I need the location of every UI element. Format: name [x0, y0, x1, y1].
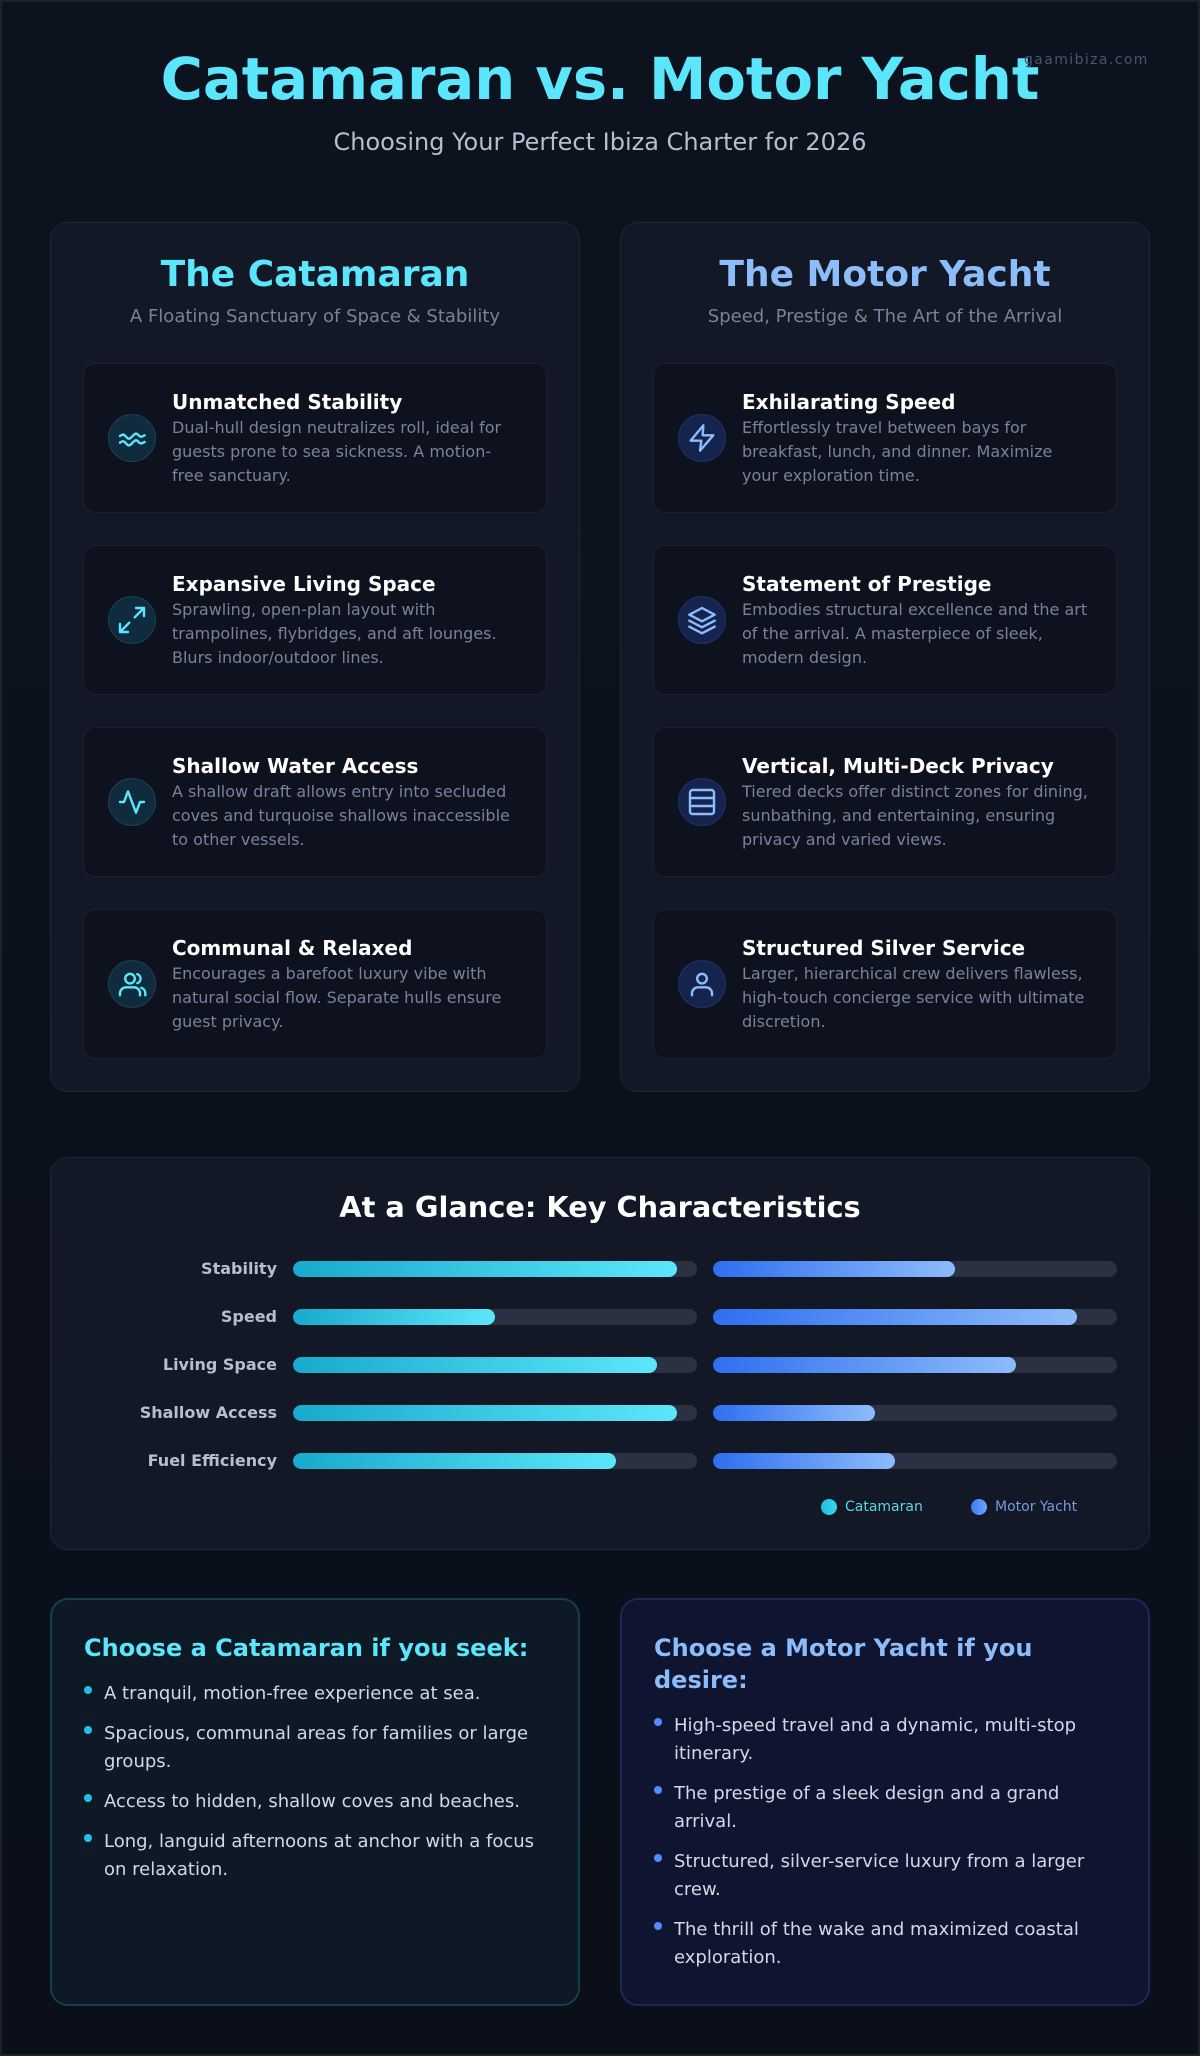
feature: privacy: sunbathing, and entertaining, ensuring — [742, 806, 1055, 825]
bullet list: A tranquil, motion-free experience at sea. — [104, 1683, 480, 1704]
feature: shallow water — [83, 727, 547, 877]
feature: speed: your exploration time. — [742, 466, 920, 485]
heading: Choose a Motor Yacht if you — [654, 1634, 1032, 1662]
panel: motor yacht — [620, 222, 1150, 1092]
feature: communal: Encourages a barefoot luxury vibe with — [172, 964, 487, 983]
feature: speed — [653, 363, 1117, 513]
feature: stability: free sanctuary. — [172, 466, 291, 485]
icon: layers — [678, 596, 726, 644]
bullet dot — [84, 1794, 92, 1802]
feature: living space — [83, 545, 547, 695]
feature: privacy: Vertical, Multi-Deck Privacy — [742, 754, 1054, 778]
feature: service: Larger, hierarchical crew delivers flawless, — [742, 964, 1083, 983]
chart heading: At a Glance: Key Characteristics — [339, 1190, 861, 1224]
feature: living space: Blurs indoor/outdoor lines. — [172, 648, 384, 667]
bars: shallow access: Shallow Access — [140, 1403, 277, 1422]
feature: stability — [83, 363, 547, 513]
icon: activity — [108, 778, 156, 826]
legend: motor yacht: Motor Yacht — [995, 1499, 1077, 1515]
feature: privacy — [653, 727, 1117, 877]
feature: prestige — [653, 545, 1117, 695]
feature: prestige: of the arrival. A masterpiece of sleek, — [742, 624, 1043, 643]
feature: stability: Unmatched Stability — [172, 390, 402, 414]
subtitle: Choosing Your Perfect Ibiza Charter for 2026 — [334, 128, 866, 156]
feature: living space: trampolines, flybridges, and aft lounges. — [172, 624, 497, 643]
bullet list: Access to hidden, shallow coves and beaches. — [104, 1791, 520, 1812]
feature: service: discretion. — [742, 1012, 826, 1031]
feature: stability: Dual-hull design neutralizes roll, ideal for — [172, 418, 501, 437]
bullet dot — [84, 1726, 92, 1734]
feature: living space: Sprawling, open-plan layout with — [172, 600, 435, 619]
bullet list: itinerary. — [674, 1743, 753, 1764]
bullet dot — [654, 1786, 662, 1794]
icon: expand arrows — [108, 596, 156, 644]
panel: choose catamaran — [50, 1598, 580, 2006]
panel: choose motor yacht — [620, 1598, 1150, 2006]
feature: communal: guest privacy. — [172, 1012, 283, 1031]
heading: the motor yacht: The Motor Yacht — [719, 254, 1051, 295]
heading: Choose a Catamaran if you seek: — [84, 1634, 528, 1662]
heading: desire: — [654, 1666, 748, 1694]
bullet list — [84, 1683, 534, 1880]
bullet dot — [84, 1686, 92, 1694]
feature: speed: Effortlessly travel between bays for — [742, 418, 1026, 437]
panel subtitle: A Floating Sanctuary of Space & Stability — [130, 306, 500, 327]
bars: fuel efficiency — [148, 1451, 1117, 1470]
bullet list: Long, languid afternoons at anchor with a focus — [104, 1831, 534, 1852]
title: Catamaran vs. Motor Yacht — [161, 46, 1039, 113]
bullet list: Spacious, communal areas for families or large — [104, 1723, 528, 1744]
bars: stability: Stability — [201, 1259, 277, 1278]
icon: user — [678, 960, 726, 1008]
bullet dot — [654, 1718, 662, 1726]
feature: communal — [83, 909, 547, 1059]
bullet list: The prestige of a sleek design and a grand — [674, 1783, 1059, 1804]
heading — [654, 1634, 1032, 1694]
bullet dot — [654, 1854, 662, 1862]
bullet list: The thrill of the wake and maximized coastal — [674, 1919, 1079, 1940]
bullet dot — [654, 1922, 662, 1930]
heading: the catamaran: The Catamaran — [161, 254, 469, 295]
feature: shallow water: Shallow Water Access — [172, 754, 418, 778]
bars: stability — [201, 1259, 1117, 1278]
icon: decks — [678, 778, 726, 826]
feature: prestige: Statement of Prestige — [742, 572, 991, 596]
feature: shallow water: to other vessels. — [172, 830, 305, 849]
feature: service — [653, 909, 1117, 1059]
bullet list: exploration. — [674, 1947, 781, 1968]
bullet list: Structured, silver-service luxury from a larger — [674, 1851, 1084, 1872]
feature: prestige: modern design. — [742, 648, 867, 667]
feature: stability: guests prone to sea sickness. A motion- — [172, 442, 491, 461]
feature: service: high-touch concierge service with ultimate — [742, 988, 1084, 1007]
bars: shallow access — [140, 1403, 1117, 1422]
panel: catamaran — [50, 222, 580, 1092]
legend: catamaran: Catamaran — [845, 1499, 923, 1515]
bullet list: arrival. — [674, 1811, 737, 1832]
bars: living space — [163, 1355, 1117, 1374]
feature: privacy: Tiered decks offer distinct zones for dining, — [742, 782, 1088, 801]
feature: living space: Expansive Living Space — [172, 572, 436, 596]
feature: privacy: privacy and varied views. — [742, 830, 947, 849]
bars: fuel efficiency: Fuel Efficiency — [148, 1451, 277, 1470]
bars: speed: Speed — [221, 1307, 277, 1326]
bullet list: on relaxation. — [104, 1859, 228, 1880]
panel: at a glance chart — [50, 1157, 1150, 1550]
feature: speed: breakfast, lunch, and dinner. Maximize — [742, 442, 1052, 461]
feature: shallow water: A shallow draft allows entry into secluded — [172, 782, 506, 801]
icon: users — [108, 960, 156, 1008]
panel subtitle: Speed, Prestige & The Art of the Arrival — [708, 306, 1062, 327]
bullet list: groups. — [104, 1751, 171, 1772]
feature: communal: natural social flow. Separate hulls ensure — [172, 988, 501, 1007]
bullet list — [654, 1715, 1084, 1968]
bullet list: crew. — [674, 1879, 721, 1900]
icon: waves — [108, 414, 156, 462]
feature: communal: Communal & Relaxed — [172, 936, 412, 960]
watermark: gaamibiza.com — [1024, 52, 1149, 68]
bars: speed — [221, 1307, 1117, 1326]
icon: lightning — [678, 414, 726, 462]
bullet list: High-speed travel and a dynamic, multi-stop — [674, 1715, 1076, 1736]
bullet dot — [84, 1834, 92, 1842]
feature: service: Structured Silver Service — [742, 936, 1025, 960]
feature: shallow water: coves and turquoise shallows inaccessible — [172, 806, 510, 825]
feature: speed: Exhilarating Speed — [742, 390, 955, 414]
bars: living space: Living Space — [163, 1355, 277, 1374]
feature: prestige: Embodies structural excellence and the art — [742, 600, 1087, 619]
